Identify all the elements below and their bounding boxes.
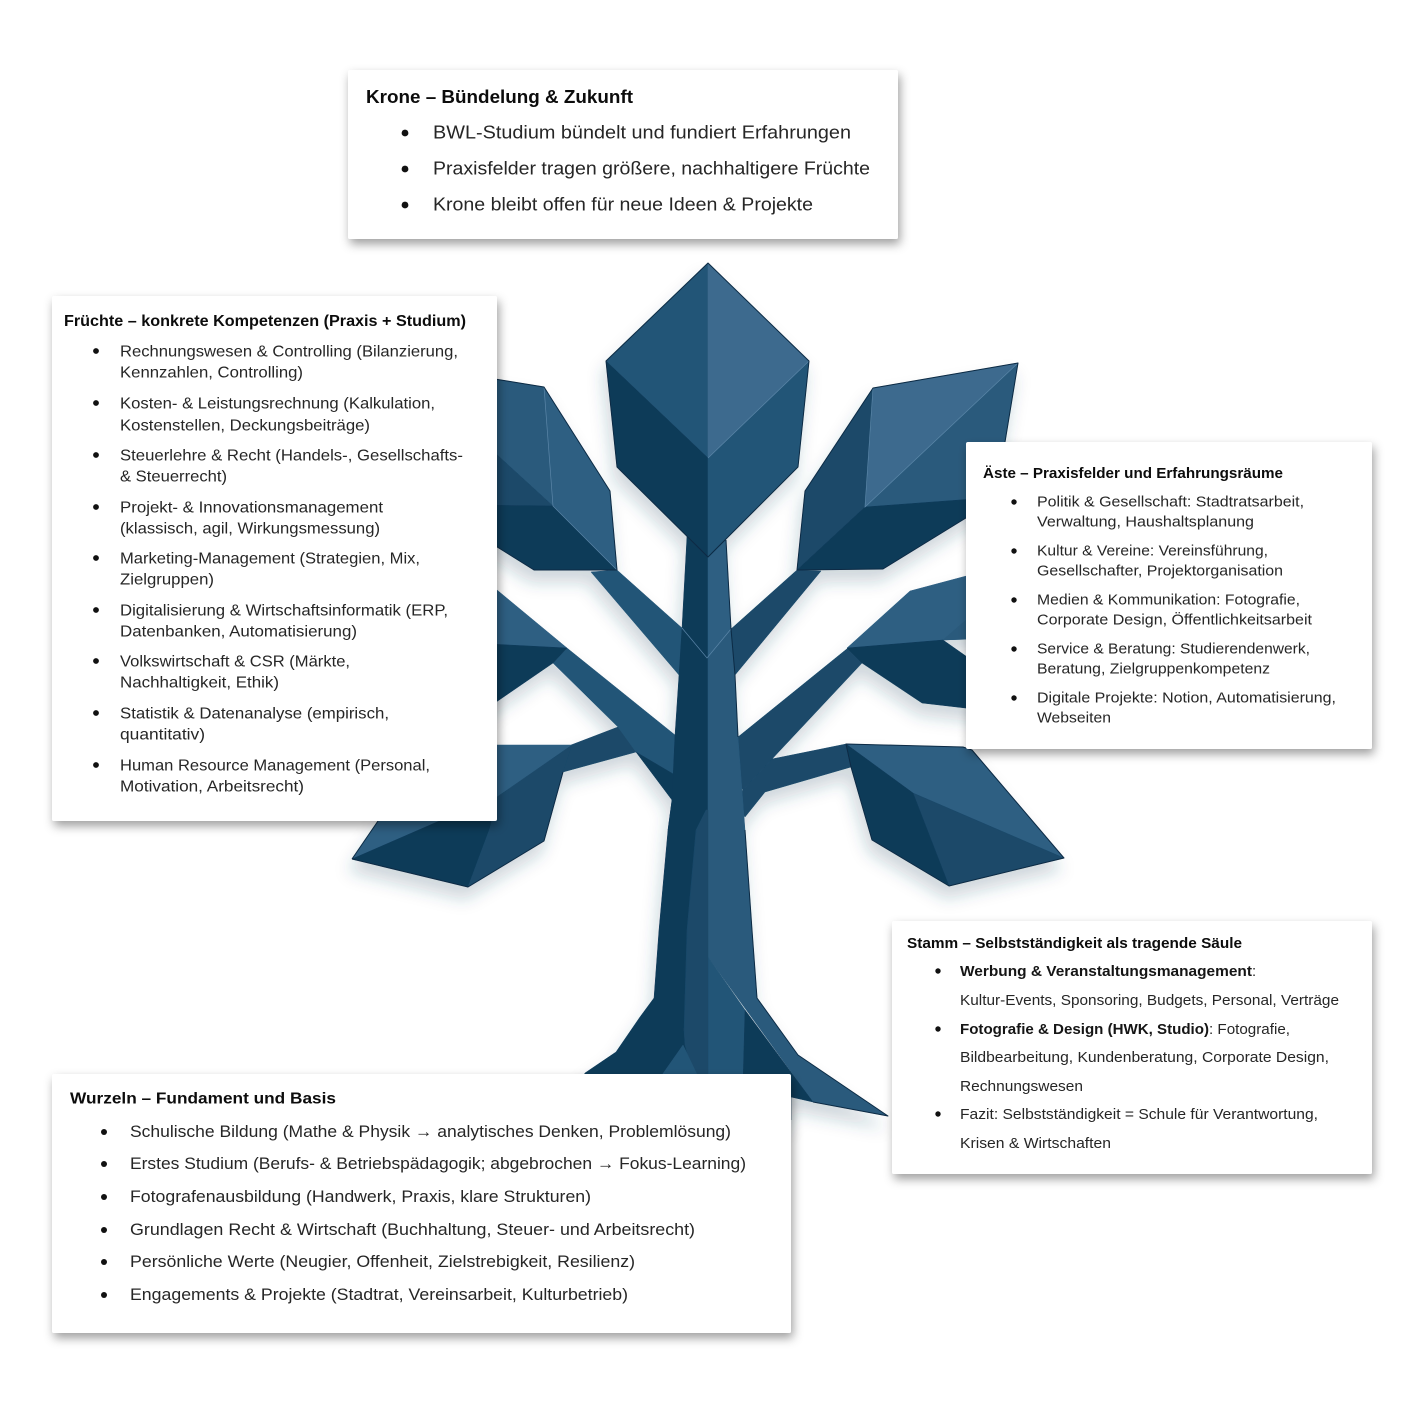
leaf: upper right xyxy=(797,363,1018,570)
list: Früchte competencies: Marketing-Management (Strategien, Mix, xyxy=(120,550,420,568)
heading: Krone: Krone – Bündelung & Zukunft xyxy=(366,86,633,107)
branch: upper left xyxy=(591,570,690,675)
list: Krone points: Praxisfelder tragen größere, nachhaltigere Früchte xyxy=(433,158,870,178)
list: Früchte competencies: Zielgruppen) xyxy=(120,572,214,588)
list: Früchte competencies: Motivation, Arbeitsrecht) xyxy=(120,778,304,796)
list: Krone points xyxy=(402,122,870,214)
branch: middle left xyxy=(553,648,703,830)
list: Früchte competencies: Statistik & Datenanalyse (empirisch, xyxy=(120,706,389,722)
list: Äste fields of practice: Verwaltung, Haushaltsplanung xyxy=(1037,514,1254,530)
list: Äste fields of practice: Politik & Gesellschaft: Stadtratsarbeit, xyxy=(1037,494,1304,510)
list: Wurzeln foundations: Engagements & Projekte (Stadtrat, Vereinsarbeit, Kulturbetrieb) xyxy=(130,1285,628,1304)
list: Stamm points: Fazit: Selbstständigkeit = Schule für Verantwortung, xyxy=(960,1107,1318,1123)
list: Früchte competencies: Datenbanken, Automatisierung) xyxy=(120,624,357,640)
list: Stamm points: Krisen & Wirtschaften xyxy=(960,1136,1111,1152)
list: Früchte competencies: quantitativ) xyxy=(120,726,205,744)
list: Früchte competencies: Projekt- & Innovationsmanagement xyxy=(120,500,384,516)
list: Äste fields of practice: Kultur & Vereine: Vereinsführung, xyxy=(1037,544,1268,560)
trunk and roots xyxy=(560,536,888,1120)
tree illustration xyxy=(352,263,1064,1120)
list: Früchte competencies: Rechnungswesen & Controlling (Bilanzierung, xyxy=(120,344,458,360)
list: Stamm points: : Fotografie, xyxy=(1209,1022,1290,1038)
list: Früchte competencies: Kostenstellen, Deckungsbeiträge) xyxy=(120,418,370,434)
list: Früchte competencies: Volkswirtschaft & CSR (Märkte, xyxy=(120,654,350,670)
list: Äste fields of practice: Service & Beratung: Studierendenwerk, xyxy=(1037,642,1310,658)
leaf: upper left xyxy=(470,375,617,570)
list: Stamm points: Kultur-Events, Sponsoring, Budgets, Personal, Verträge xyxy=(960,993,1339,1009)
list: Früchte competencies: & Steuerrecht) xyxy=(120,468,227,486)
list: Stamm points: Bildbearbeitung, Kundenberatung, Corporate Design, xyxy=(960,1050,1329,1066)
list: Äste fields of practice: Beratung, Zielgruppenkompetenz xyxy=(1037,662,1270,678)
list: Früchte competencies: Kennzahlen, Controlling) xyxy=(120,364,303,382)
list: Stamm points xyxy=(935,964,1339,1152)
panel: Äste xyxy=(966,442,1372,749)
list: Früchte competencies: (klassisch, agil, Wirkungsmessung) xyxy=(120,520,380,538)
panel: Stamm xyxy=(892,921,1372,1174)
branch: lower left xyxy=(563,727,645,772)
list: Wurzeln foundations: Erstes Studium (Berufs- & Betriebspädagogik; abgebrochen → Fokus-Learning) xyxy=(130,1154,746,1173)
list: Stamm points: : xyxy=(1252,964,1256,980)
heading: Stamm: Stamm – Selbstständigkeit als tragende Säule xyxy=(907,935,1242,952)
leaf: middle left xyxy=(470,585,567,720)
heading: Früchte: Früchte – konkrete Kompetenzen (Praxis + Studium) xyxy=(64,313,466,330)
list: Früchte competencies: Human Resource Management (Personal, xyxy=(120,758,430,774)
list: Wurzeln foundations: Schulische Bildung (Mathe & Physik → analytisches Denken, Problemlösung) xyxy=(130,1122,731,1141)
list: Äste fields of practice: Gesellschafter, Projektorganisation xyxy=(1037,564,1283,580)
panel: Krone xyxy=(348,70,898,239)
branch: middle right xyxy=(730,648,862,790)
branch: upper right xyxy=(726,570,821,675)
leaf: lower left xyxy=(352,745,572,887)
list: Krone points: Krone bleibt offen für neue Ideen & Projekte xyxy=(433,194,813,214)
list: Stamm points: Werbung & Veranstaltungsmanagement xyxy=(960,964,1252,980)
list: Krone points: BWL-Studium bündelt und fundiert Erfahrungen xyxy=(433,122,851,142)
list: Früchte competencies: Steuerlehre & Recht (Handels-, Gesellschafts- xyxy=(120,448,463,464)
leaf: top xyxy=(606,263,809,557)
heading: Wurzeln: Wurzeln – Fundament und Basis xyxy=(70,1090,336,1108)
list: Früchte competencies: Nachhaltigkeit, Ethik) xyxy=(120,674,279,692)
leaf: middle right xyxy=(847,567,1000,712)
list: Äste fields of practice: Digitale Projekte: Notion, Automatisierung, xyxy=(1037,690,1336,706)
list: Wurzeln foundations: Fotografenausbildung (Handwerk, Praxis, klare Strukturen) xyxy=(130,1187,591,1206)
list: Äste fields of practice xyxy=(1011,494,1336,726)
leaf: lower right xyxy=(846,744,1064,886)
branch: lower right xyxy=(735,744,851,817)
panel: Früchte xyxy=(52,296,497,821)
list: Stamm points: Fotografie & Design (HWK, Studio) xyxy=(960,1022,1209,1038)
list: Äste fields of practice: Corporate Design, Öffentlichkeitsarbeit xyxy=(1037,610,1312,628)
list: Äste fields of practice: Medien & Kommunikation: Fotografie, xyxy=(1037,592,1300,608)
list: Äste fields of practice: Webseiten xyxy=(1037,710,1111,726)
list: Früchte competencies: Kosten- & Leistungsrechnung (Kalkulation, xyxy=(120,396,435,412)
panel: Wurzeln xyxy=(52,1074,791,1333)
list: Wurzeln foundations xyxy=(101,1122,746,1304)
list: Stamm points: Rechnungswesen xyxy=(960,1079,1083,1095)
list: Wurzeln foundations: Persönliche Werte (Neugier, Offenheit, Zielstrebigkeit, Resilienz) xyxy=(130,1252,635,1271)
list: Früchte competencies xyxy=(93,344,463,796)
list: Wurzeln foundations: Grundlagen Recht & Wirtschaft (Buchhaltung, Steuer- und Arbeitsrecht) xyxy=(130,1220,695,1239)
heading: Äste: Äste – Praxisfelder und Erfahrungsräume xyxy=(983,465,1283,482)
list: Früchte competencies: Digitalisierung & Wirtschaftsinformatik (ERP, xyxy=(120,602,448,620)
